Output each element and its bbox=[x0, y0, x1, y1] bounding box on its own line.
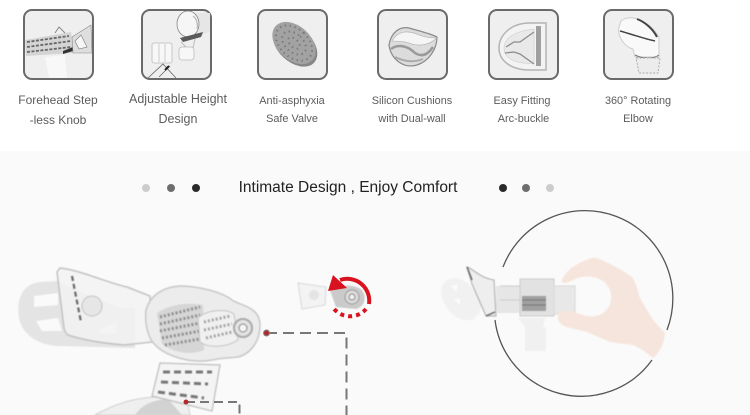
caption: rotating elbow: Elbow bbox=[623, 113, 653, 125]
small knob illustration bbox=[298, 283, 365, 309]
caption: safe valve: Safe Valve bbox=[266, 113, 318, 125]
caption: forehead knob bbox=[18, 93, 98, 127]
red rotate arrow bbox=[328, 275, 369, 316]
icon box: safe valve bbox=[257, 9, 328, 80]
dots right bbox=[499, 184, 554, 192]
caption: silicon cushions: with Dual-wall bbox=[378, 113, 446, 125]
dots left bbox=[142, 184, 200, 192]
caption: easy fitting: Easy Fitting bbox=[494, 95, 550, 107]
mask in hand illustration bbox=[441, 267, 575, 351]
caption: safe valve bbox=[259, 95, 325, 125]
mask product with dial bbox=[18, 268, 260, 415]
icon box: arc buckle bbox=[488, 9, 559, 80]
section heading: Intimate Design , Enjoy Comfort bbox=[239, 179, 457, 196]
caption: adjustable height: Adjustable Height bbox=[129, 92, 227, 106]
icon box: adjustable height bbox=[141, 9, 212, 80]
icon box: rotating elbow bbox=[603, 9, 674, 80]
caption: adjustable height bbox=[129, 92, 227, 126]
callout line: knob bbox=[264, 330, 346, 415]
caption: easy fitting bbox=[494, 95, 550, 125]
icon box: silicon cushion bbox=[377, 9, 448, 80]
hand bbox=[558, 258, 665, 358]
caption: easy fitting: Arc-buckle bbox=[498, 113, 549, 125]
callout line: height bbox=[184, 400, 240, 415]
caption: adjustable height: Design bbox=[159, 112, 197, 126]
caption: rotating elbow: 360° Rotating bbox=[605, 95, 671, 107]
caption: forehead knob: -less Knob bbox=[30, 113, 86, 127]
caption: silicon cushions bbox=[372, 95, 452, 125]
caption: rotating elbow bbox=[605, 95, 671, 125]
caption: forehead knob: Forehead Step bbox=[18, 93, 98, 107]
caption: safe valve: Anti-asphyxia bbox=[259, 95, 325, 107]
icon box: forehead knob bbox=[23, 9, 94, 80]
comfort circle bbox=[495, 211, 673, 396]
lower background panel bbox=[0, 151, 750, 415]
caption: silicon cushions: Silicon Cushions bbox=[372, 95, 452, 107]
